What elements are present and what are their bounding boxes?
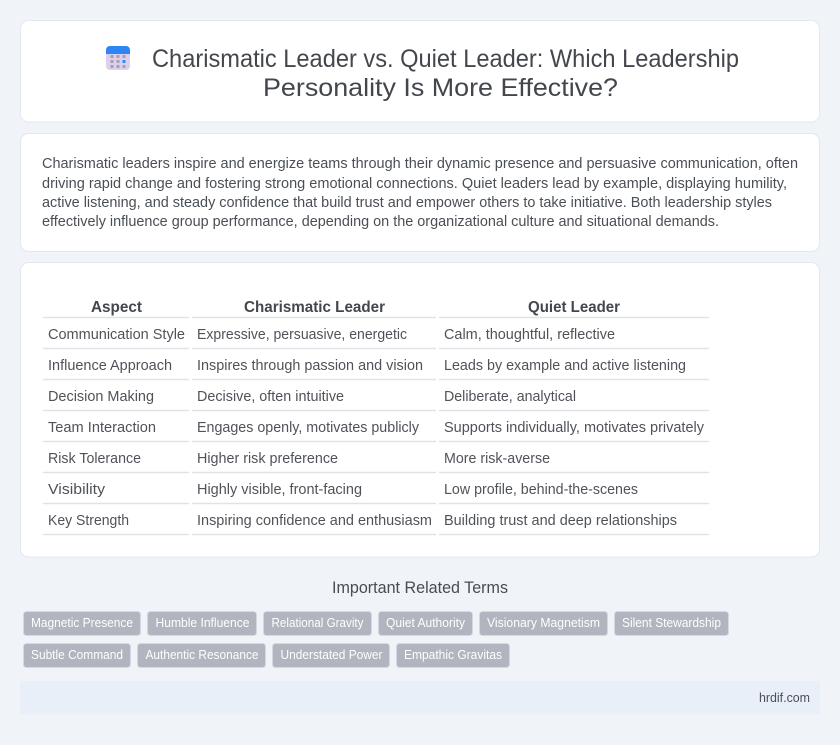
row: key strength: Inspiring confidence and enthusiasm <box>197 512 432 529</box>
row: risk tolerance: Higher risk preference <box>197 450 338 467</box>
icon: calendar grid <box>106 46 130 70</box>
tags: related terms: Visionary Magnetism <box>487 615 600 630</box>
heading: related terms: Important Related Terms <box>332 579 508 597</box>
panel: introduction paragraph <box>20 134 820 252</box>
row: decision making: Decision Making <box>48 388 154 405</box>
panel: header <box>20 20 820 122</box>
panel: comparison table <box>20 262 820 557</box>
row: key strength <box>48 512 677 529</box>
row: decision making <box>48 388 576 405</box>
row: key strength: Building trust and deep relationships <box>444 512 677 529</box>
table header row: Aspect <box>91 299 143 316</box>
footer: hrdif.com <box>759 690 810 705</box>
row: visibility: Visibility <box>48 482 106 498</box>
title: Charismatic Leader vs. Quiet Leader: Which Leadership <box>152 46 739 73</box>
tags: related terms: Magnetic Presence <box>31 615 133 630</box>
tags: related terms: Humble Influence <box>156 615 250 630</box>
row: key strength: Key Strength <box>48 512 129 529</box>
row: communication style <box>48 326 615 343</box>
row: decision making: Deliberate, analytical <box>444 388 576 405</box>
panel: introduction paragraph: active listening, and steady confidence that build trust and empower others to take initiative. Both leadership styles <box>42 194 772 211</box>
row: risk tolerance: More risk-averse <box>444 450 550 467</box>
row: risk tolerance <box>48 450 550 467</box>
row: visibility: Highly visible, front-facing <box>197 481 362 498</box>
row: communication style: Communication Style <box>48 326 185 343</box>
row: visibility: Low profile, behind-the-scenes <box>444 481 638 498</box>
table header row: Charismatic Leader <box>244 299 385 316</box>
tags: related terms: Subtle Command <box>31 647 123 662</box>
tags: related terms: Empathic Gravitas <box>404 647 502 662</box>
tags: related terms: Silent Stewardship <box>622 615 721 630</box>
tags: related terms: Understated Power <box>280 647 383 662</box>
row: influence approach: Influence Approach <box>48 357 172 374</box>
row: team interaction: Supports individually, motivates privately <box>444 419 704 436</box>
tags: related terms: Authentic Resonance <box>146 647 258 662</box>
row: team interaction: Team Interaction <box>48 419 156 436</box>
row: team interaction: Engages openly, motivates publicly <box>197 419 419 436</box>
tags: related terms: Quiet Authority <box>386 615 466 630</box>
tags: related terms: Relational Gravity <box>272 615 364 630</box>
row: risk tolerance: Risk Tolerance <box>48 450 141 467</box>
panel: introduction paragraph: Charismatic leaders inspire and energize teams through their dynamic presence and persuasive communication, often <box>42 155 798 172</box>
row: team interaction <box>48 419 704 436</box>
tags: related terms <box>24 612 728 668</box>
table header row: Quiet Leader <box>528 299 620 316</box>
title <box>152 46 739 102</box>
row: influence approach: Inspires through passion and vision <box>197 357 423 374</box>
row: visibility <box>48 481 638 498</box>
panel: introduction paragraph: driving rapid change and fostering strong emotional connections. Quiet leaders lead by example, displaying humility, <box>42 175 787 192</box>
row: communication style: Expressive, persuasive, energetic <box>197 326 407 343</box>
row: communication style: Calm, thoughtful, reflective <box>444 326 615 343</box>
row: influence approach: Leads by example and active listening <box>444 357 686 374</box>
table header row <box>91 299 620 316</box>
row: decision making: Decisive, often intuitive <box>197 388 344 405</box>
row: influence approach <box>48 357 686 374</box>
title: Personality Is More Effective? <box>263 75 618 102</box>
panel: introduction paragraph: effectively influence group performance, depending on the organizational culture and situational demands. <box>42 213 719 230</box>
footer <box>20 681 820 714</box>
